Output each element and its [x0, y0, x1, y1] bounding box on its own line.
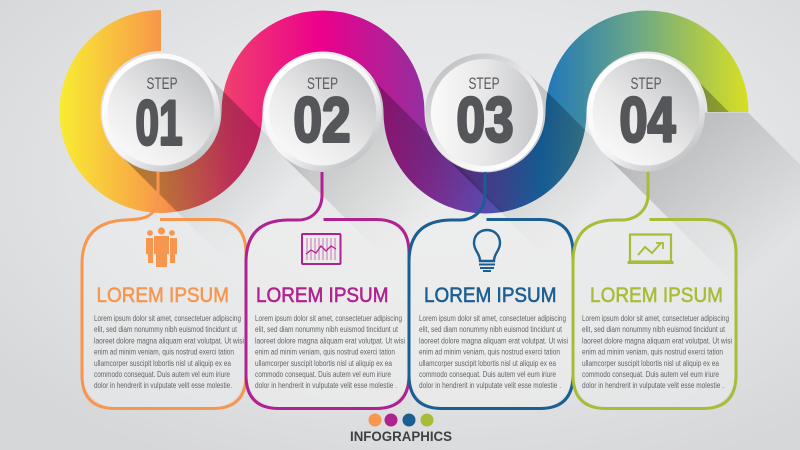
step button 4: STEP: [630, 75, 662, 93]
text block: commodo consequat. Duis autem vel eum iriure: [582, 370, 719, 379]
text block: enim ad minim veniam, quis nostrud exerci tation: [582, 348, 723, 357]
text block: enim ad minim veniam, quis nostrud exerci tation: [419, 348, 560, 357]
text block: enim ad minim veniam, quis nostrud exerci tation: [94, 348, 234, 357]
icon: trend screen: [628, 234, 674, 262]
text block: dolor in hendrerit in vulputate velit esse molestie.: [94, 381, 232, 390]
text block: Lorem ipsum dolor sit amet, consectetuer adipiscing: [419, 314, 566, 323]
footer legend dots: [368, 414, 434, 426]
heading: LOREM IPSUM: [424, 284, 556, 307]
icon: people: [146, 227, 177, 267]
long shadows on ribbon: [125, 82, 729, 212]
text block: Lorem ipsum dolor sit amet, consectetuer adipiscing: [255, 314, 402, 323]
text block: elit, sed diam nonummy nibh euismod tincidunt ut: [419, 325, 563, 334]
step button 1: [102, 54, 220, 172]
text block: dolor in hendrerit in vulputate velit esse molestie .: [419, 381, 561, 390]
icon: chart board: [302, 234, 340, 264]
step button 3: [425, 54, 543, 172]
text block: laoreet dolore magna aliquam erat volutpat. Ut wisi: [582, 336, 732, 345]
text block: [94, 314, 244, 390]
heading: LOREM IPSUM: [256, 284, 388, 307]
panel: step 3: [409, 172, 573, 408]
panel: step 4: [573, 172, 736, 408]
text block: laoreet dolore magna aliquam erat volutpat. Ut wisi: [255, 336, 405, 345]
heading: LOREM IPSUM: [96, 284, 229, 307]
text block: dolor in hendrerit in vulputate velit esse molestie .: [582, 381, 724, 390]
text block: elit, sed diam nonummy nibh euismod tincidunt ut: [94, 325, 238, 334]
text block: laoreet dolore magna aliquam erat volutpat. Ut wisi: [419, 336, 568, 345]
text block: commodo consequat. Duis autem vel eum iriure: [255, 370, 391, 379]
text block: dolor in hendrerit in vulputate velit esse molestie .: [255, 381, 397, 390]
heading: LOREM IPSUM: [590, 284, 723, 307]
footer title: INFOGRAPHICS: [350, 429, 452, 444]
text block: ullamcorper suscipit lobortis nisl ut aliquip ex ea: [94, 359, 231, 368]
step button 1: 01: [136, 88, 182, 158]
text block: ullamcorper suscipit lobortis nisl ut aliquip ex ea: [582, 359, 719, 368]
text block: elit, sed diam nonummy nibh euismod tincidunt ut: [255, 325, 399, 334]
text block: [419, 314, 568, 390]
text block: elit, sed diam nonummy nibh euismod tincidunt ut: [582, 325, 726, 334]
gradient ribbon: [80, 30, 728, 193]
text block: commodo consequat. Duis autem vel eum iriure: [94, 370, 230, 379]
step button 4: [587, 54, 705, 172]
panel: step 2: [246, 172, 409, 408]
text block: commodo consequat. Duis autem vel eum iriure: [419, 370, 556, 379]
text block: laoreet dolore magna aliquam erat volutpat. Ut wisi: [94, 336, 244, 345]
text block: Lorem ipsum dolor sit amet, consectetuer adipiscing: [94, 314, 241, 323]
step button 3: 03: [456, 86, 514, 156]
text block: [255, 314, 405, 390]
text block: enim ad minim veniam, quis nostrud exerci tation: [255, 348, 395, 357]
text block: [582, 314, 732, 390]
text block: ullamcorper suscipit lobortis nisl ut aliquip ex ea: [255, 359, 392, 368]
step button 2: 02: [294, 86, 350, 156]
long shadows on background: [119, 71, 800, 304]
step button 2: [264, 54, 382, 172]
step button 4: 04: [620, 86, 676, 156]
icon: light bulb: [474, 230, 500, 271]
text block: Lorem ipsum dolor sit amet, consectetuer adipiscing: [582, 314, 729, 323]
step button 3: STEP: [468, 75, 500, 93]
text block: ullamcorper suscipit lobortis nisl ut aliquip ex ea: [419, 359, 556, 368]
panel: step 1: [82, 172, 246, 408]
step button 1: STEP: [146, 75, 178, 93]
step button 2: STEP: [307, 75, 338, 93]
